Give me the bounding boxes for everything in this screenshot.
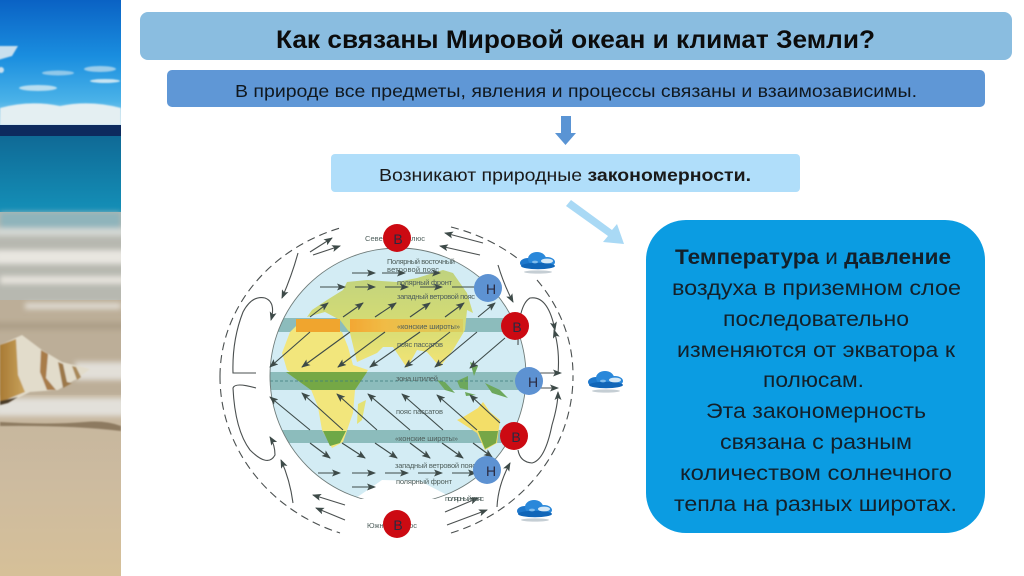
diagram: globe with pressure belts and winds xyxy=(220,224,623,538)
belt labels: Северный полюс xyxy=(365,234,425,243)
background photo: sea and shell strip xyxy=(0,0,131,576)
map: Australia xyxy=(457,402,500,450)
low pressure marker: upper: Н xyxy=(486,281,496,297)
map: Antarctica xyxy=(358,480,446,499)
belt labels: пояс пассатов xyxy=(397,340,443,349)
belt labels: ветровой пояс xyxy=(387,265,439,274)
belt labels: «конские широты» xyxy=(397,322,460,331)
panel: temperature and pressure explanation xyxy=(646,220,985,533)
icon: cloud north xyxy=(520,252,555,274)
high pressure marker: lower xyxy=(500,422,528,450)
belt labels: западный ветровой пояс xyxy=(397,292,475,301)
belt labels xyxy=(365,234,484,530)
subtitle bar: В природе все предметы, явления и процессы связаны и взаимозависимы. xyxy=(235,81,917,101)
low pressure marker: lower: Н xyxy=(486,463,496,479)
icon: sea shell xyxy=(0,335,90,405)
subtitle bar xyxy=(167,70,985,107)
belt labels: полярный фронт xyxy=(396,477,453,486)
belt labels: полярный пояс xyxy=(445,494,484,503)
panel: temperature and pressure explanation: воздуха в приземном слое xyxy=(672,277,961,300)
map: bands xyxy=(260,318,530,443)
map: Eurasia xyxy=(307,270,473,368)
high pressure marker: north pole xyxy=(383,224,411,252)
panel: temperature and pressure explanation: Эта закономерность xyxy=(706,400,926,423)
high pressure marker: south pole xyxy=(383,510,411,538)
belt labels: зона штилей xyxy=(396,374,438,383)
outer circulation dashes xyxy=(220,227,573,533)
high pressure marker: south pole: В xyxy=(393,517,403,533)
low pressure marker: equator: Н xyxy=(528,374,538,390)
panel: temperature and pressure explanation: последовательно xyxy=(723,308,909,331)
panel: temperature and pressure explanation: количеством солнечного xyxy=(680,462,952,485)
high pressure marker: lower: В xyxy=(511,429,521,445)
panel: temperature and pressure explanation: Температура и давление xyxy=(675,246,951,269)
inner air loops xyxy=(233,233,561,525)
belt labels: «конские широты» xyxy=(395,434,458,443)
arrow: diagonal to text panel xyxy=(566,200,624,244)
map: climate shading xyxy=(296,319,340,332)
high pressure marker: north pole: В xyxy=(393,231,403,247)
panel: temperature and pressure explanation: тепла на разных широтах. xyxy=(674,493,957,516)
low pressure marker: lower xyxy=(473,456,501,484)
globe map xyxy=(260,248,530,512)
icon: cloud south xyxy=(517,500,552,522)
panel: temperature and pressure explanation: полюсам. xyxy=(763,369,864,392)
patterns bar: Возникают природные закономерности. xyxy=(379,165,751,185)
high pressure marker: upper: В xyxy=(512,319,522,335)
patterns bar xyxy=(331,154,800,192)
belt labels: западный ветровой пояс xyxy=(395,461,476,470)
icon: cloud equator xyxy=(588,371,623,393)
belt labels: Южный полюс xyxy=(367,521,417,530)
low pressure marker: equator xyxy=(515,367,543,395)
belt labels: пояс пассатов xyxy=(396,407,443,416)
panel: temperature and pressure explanation: связана с разным xyxy=(720,431,912,454)
belt labels: Полярный восточный xyxy=(387,257,455,266)
map: Africa xyxy=(282,320,368,448)
map: Madagascar xyxy=(357,400,366,424)
title bar xyxy=(140,12,1012,60)
title bar: Как связаны Мировой океан и климат Земли? xyxy=(276,26,875,54)
belt labels: полярный фронт xyxy=(397,278,453,287)
high pressure marker: upper xyxy=(501,312,529,340)
low pressure marker: upper xyxy=(474,274,502,302)
arrow: down xyxy=(555,116,576,145)
panel: temperature and pressure explanation: изменяются от экватора к xyxy=(677,339,956,362)
wind arrows xyxy=(270,273,505,487)
